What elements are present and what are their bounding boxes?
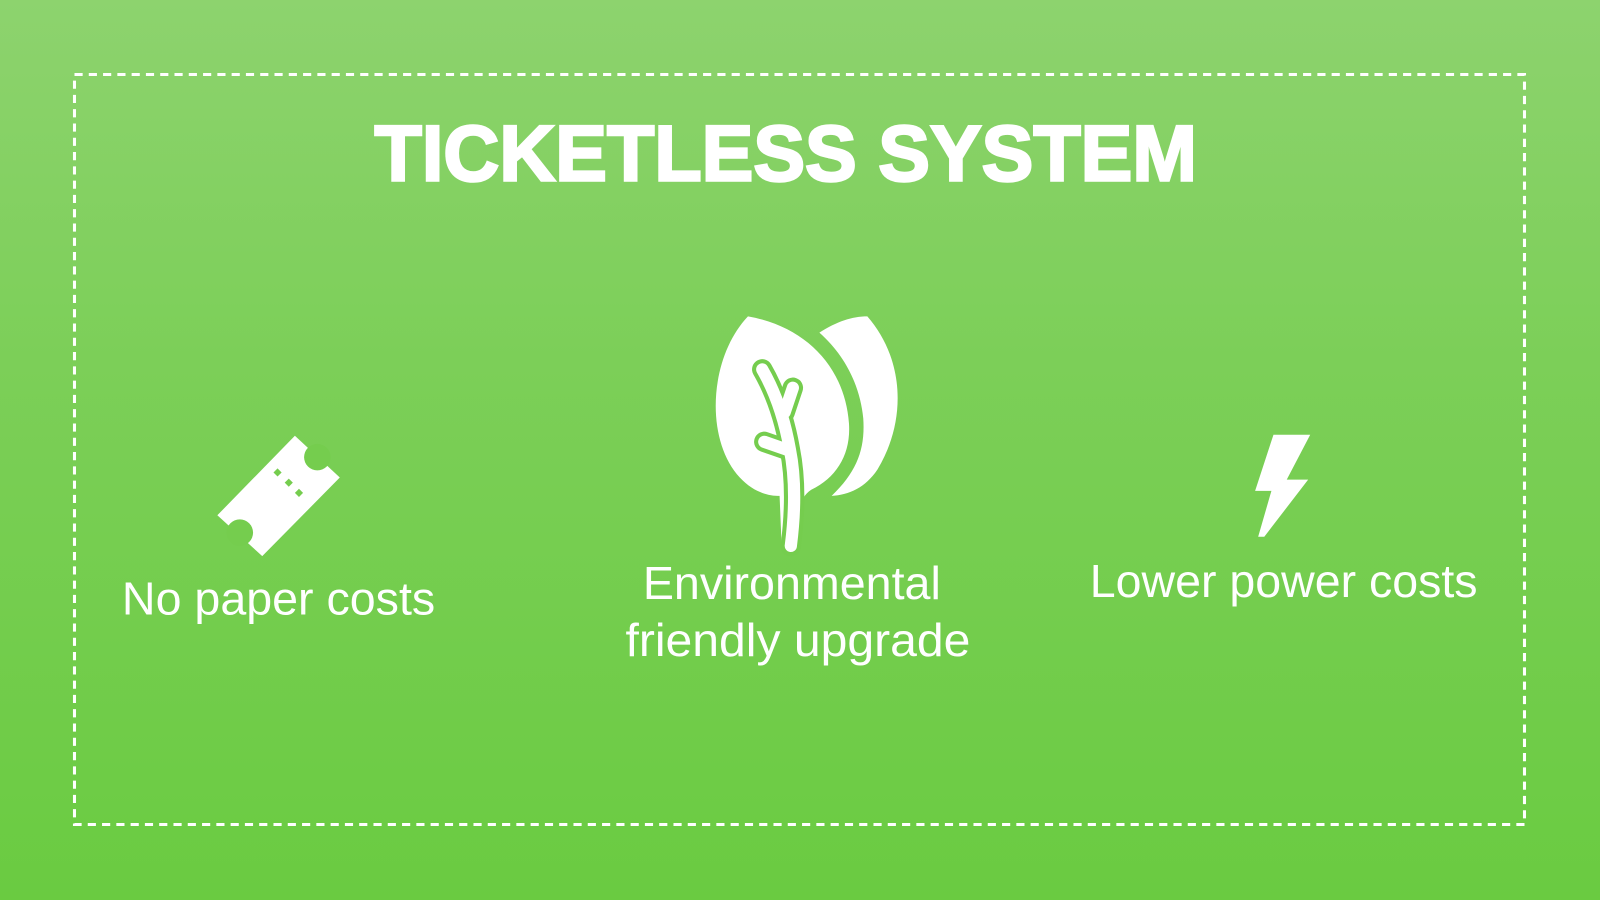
text: environmental friendly upgrade xyxy=(626,557,970,666)
text: environmental friendly upgrade: Environmental xyxy=(643,557,941,609)
frame: dashed border xyxy=(74,74,1524,824)
icon: leaf xyxy=(716,316,898,546)
icon: lightning bolt xyxy=(1255,435,1310,537)
text: environmental friendly upgrade: friendly upgrade xyxy=(626,614,970,666)
text: no paper costs: No paper costs xyxy=(122,572,435,624)
icon: ticket xyxy=(217,436,340,556)
title: TICKETLESS SYSTEM xyxy=(374,110,1197,198)
text: lower power costs: Lower power costs xyxy=(1090,555,1478,607)
